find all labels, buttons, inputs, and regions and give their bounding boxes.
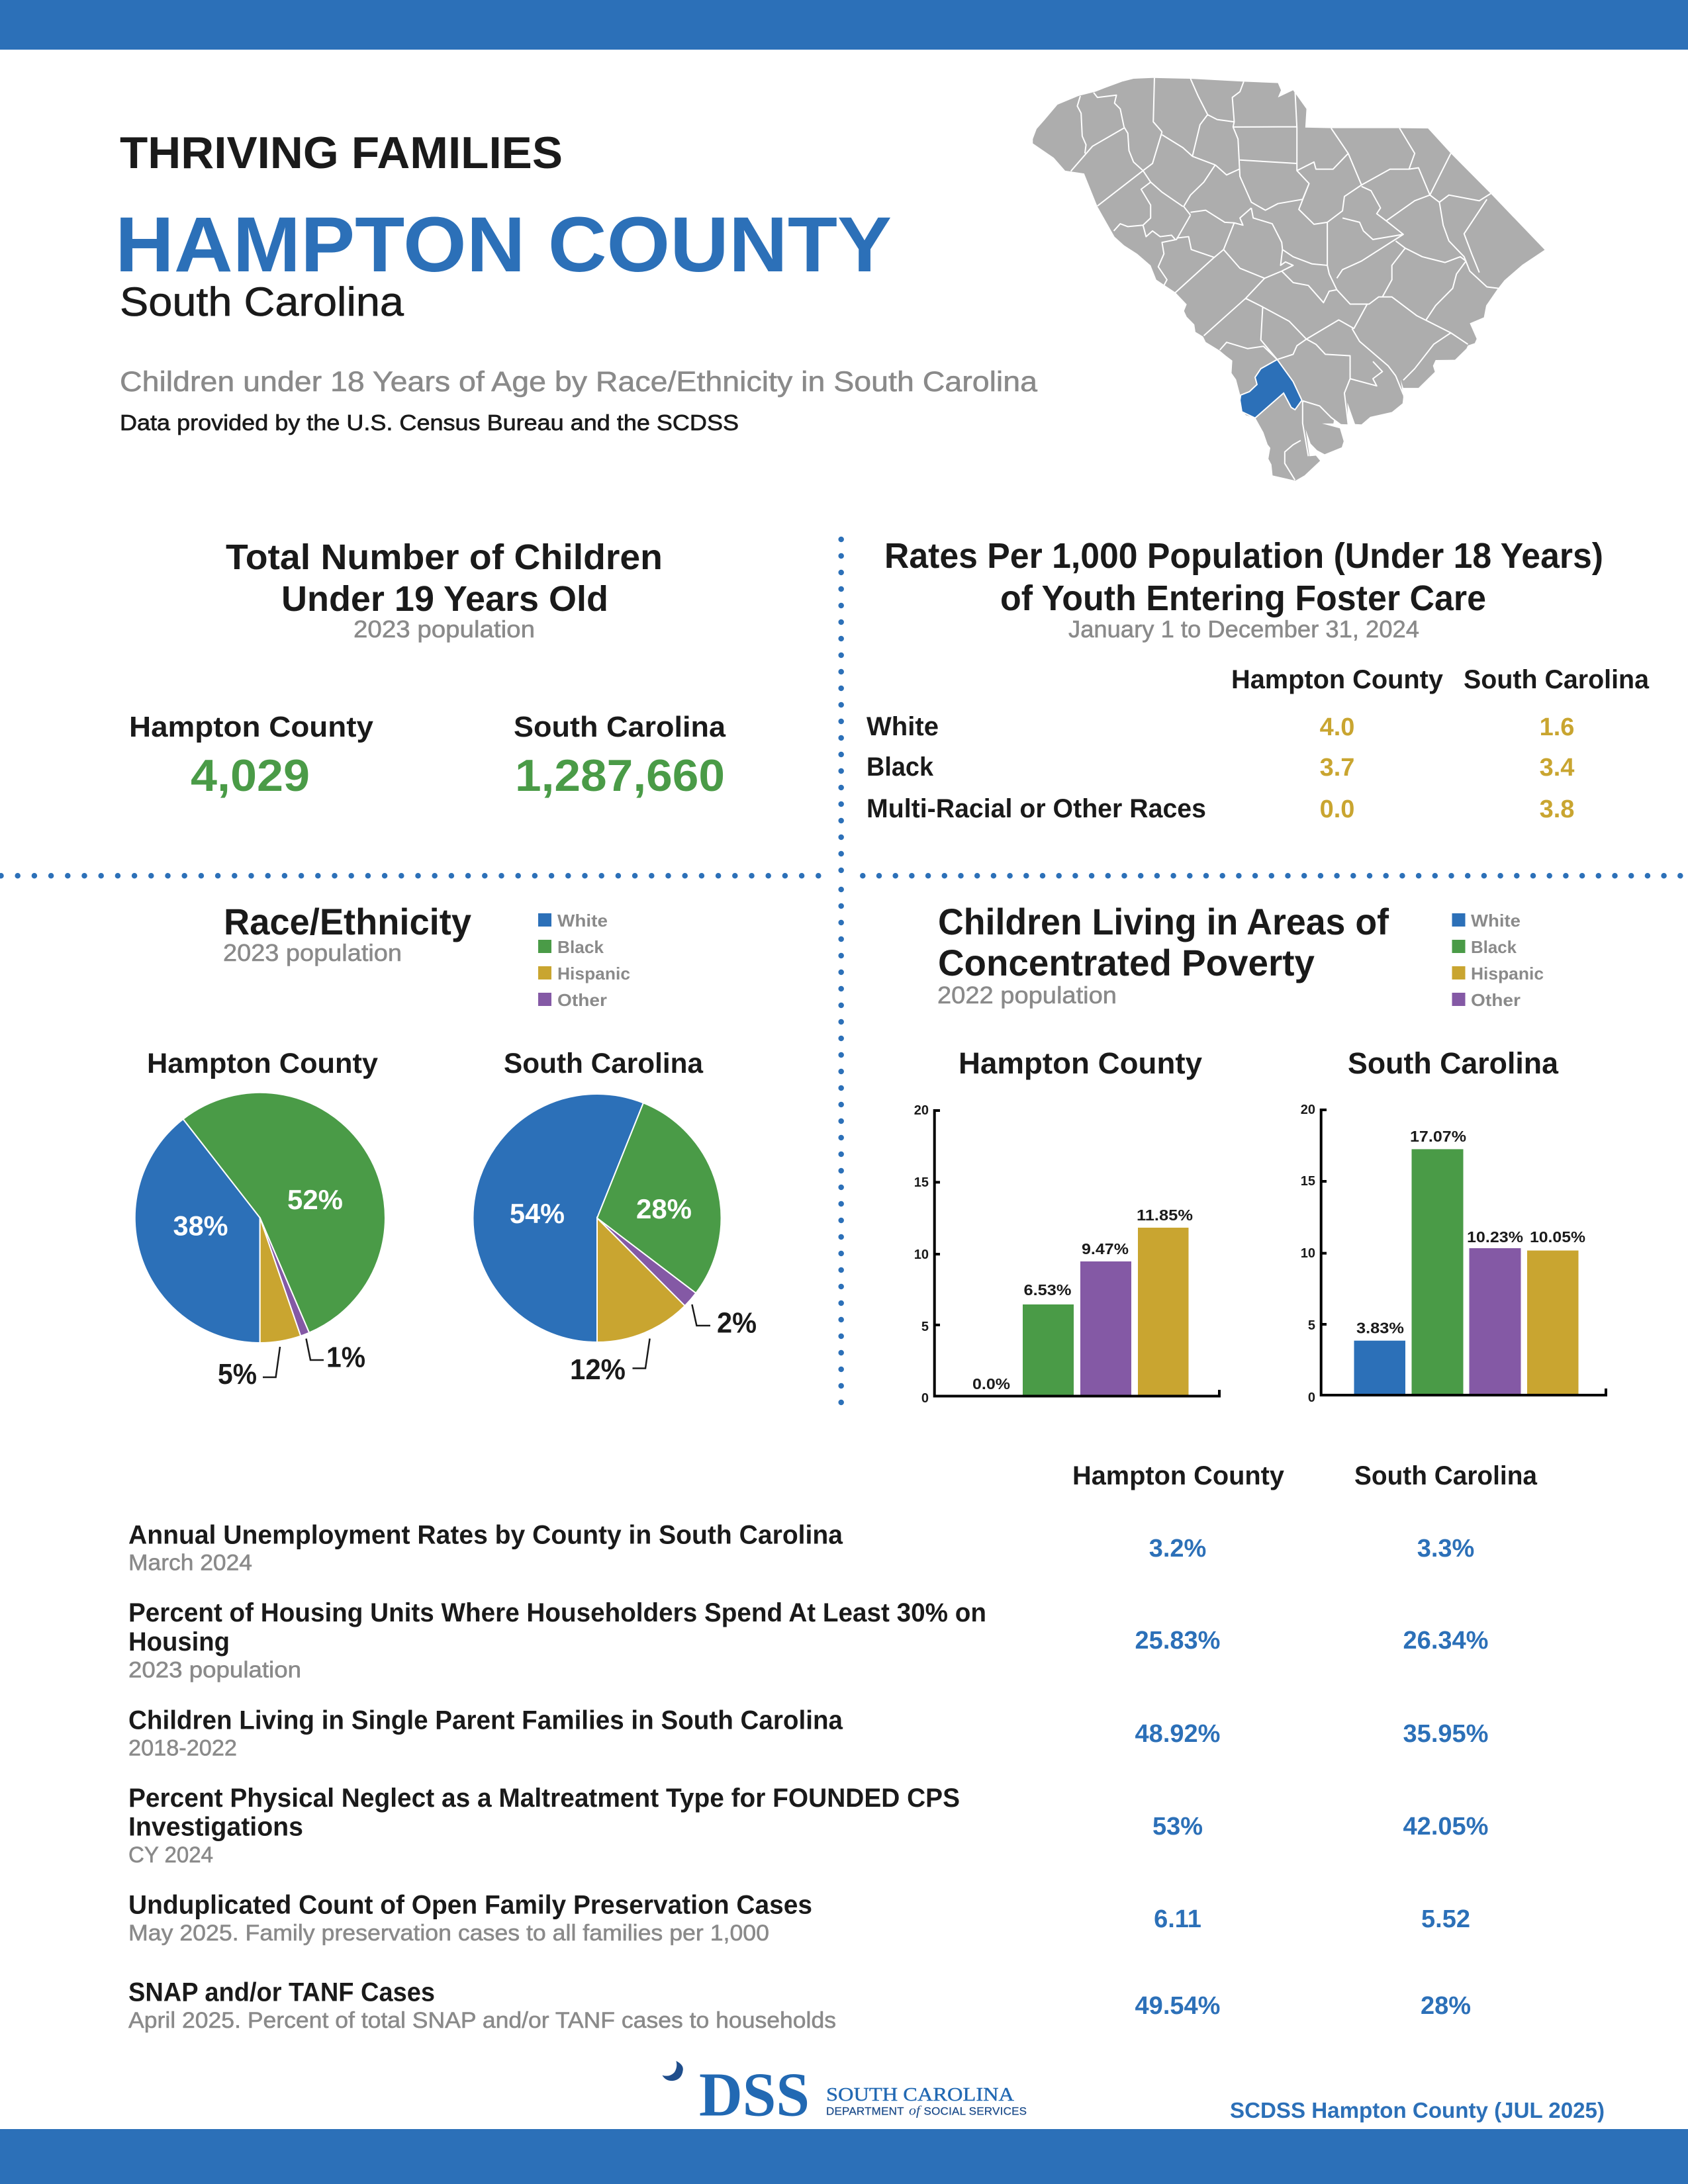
dotted divider: horizontal right xyxy=(863,873,1688,879)
bar chart: South Carolina: 5 xyxy=(1308,1318,1315,1333)
icon: crescent moon xyxy=(662,2061,683,2081)
legend: Black xyxy=(557,937,604,957)
sub heading: 2022 population xyxy=(937,981,1117,1009)
row: SNAP TANF xyxy=(128,1978,1471,2033)
panel: foster care rates: 3.8 xyxy=(1540,796,1574,823)
dotted divider: vertical lower xyxy=(838,889,844,1410)
legend: White xyxy=(1471,911,1521,931)
South Carolina count: 1,287,660 xyxy=(515,751,725,801)
heading: Race/Ethnicity xyxy=(224,901,471,942)
pie chart: South Carolina xyxy=(473,1094,721,1342)
logo: SC DSS: DEPARTMENT xyxy=(826,2105,904,2118)
row: single parent families: Children Living in Single Parent Families in South Carolina xyxy=(128,1706,843,1735)
sub heading: 2023 population xyxy=(353,615,535,643)
bar chart: Hampton County xyxy=(914,1103,1219,1406)
legend: Other xyxy=(1471,990,1521,1010)
row: physical neglect: CY 2024 xyxy=(128,1843,213,1868)
panel: race ethnicity pies xyxy=(135,901,757,1390)
row: unemployment: 3.3% xyxy=(1417,1535,1474,1563)
row: physical neglect: 53% xyxy=(1152,1813,1203,1841)
pie labels: Hampton County: 1% xyxy=(326,1341,365,1374)
row: physical neglect: 42.05% xyxy=(1403,1813,1488,1841)
legend xyxy=(1452,911,1544,1010)
map of South Carolina with Hampton County highlighted xyxy=(1033,78,1544,480)
row: physical neglect xyxy=(128,1784,1488,1868)
bar chart: Hampton County: 0 xyxy=(921,1391,929,1406)
pie chart: Hampton County xyxy=(135,1093,385,1343)
dotted divider: vertical upper xyxy=(838,539,844,871)
panel: foster care rates: 3.4 xyxy=(1540,754,1574,782)
panel: foster care rates: of Youth Entering Foster Care xyxy=(1000,578,1486,618)
row: SNAP TANF: 28% xyxy=(1421,1992,1471,2020)
title: Hampton County: HAMPTON COUNTY xyxy=(115,201,892,289)
row: family preservation xyxy=(128,1890,1470,1946)
bar chart: South Carolina: 3.83% xyxy=(1356,1320,1404,1337)
logo: SC DSS: SOUTH CAROLINA xyxy=(826,2084,1014,2105)
bottom banner xyxy=(0,2129,1688,2184)
legend: White xyxy=(557,911,608,931)
legend: Black xyxy=(1471,937,1517,957)
column headers: Hampton County xyxy=(1072,1461,1285,1490)
panel: foster care rates: 4.0 xyxy=(1320,713,1354,741)
Hampton pie heading: Hampton County xyxy=(147,1048,378,1079)
row: family preservation: 5.52 xyxy=(1421,1905,1470,1933)
rows: White xyxy=(867,712,939,741)
bar chart: South Carolina xyxy=(1301,1103,1606,1405)
Hampton County count: 4,029 xyxy=(191,751,310,801)
bar chart: South Carolina: 15 xyxy=(1301,1174,1315,1189)
bar chart: Hampton County: 5 xyxy=(921,1320,929,1334)
bar chart: South Carolina: 0 xyxy=(1308,1390,1315,1405)
dotted divider: horizontal left xyxy=(1,873,819,879)
bar chart: Hampton County: 6.53% xyxy=(1023,1281,1071,1298)
panel: foster care rates: 0.0 xyxy=(1320,796,1354,823)
panel: total number of children: Under 19 Years Old xyxy=(281,579,608,619)
pie labels: South Carolina xyxy=(510,1193,757,1386)
row: housing: 25.83% xyxy=(1135,1627,1220,1655)
panel: indicators table: South Carolina xyxy=(1354,1461,1538,1490)
panel: foster care rates: 1.6 xyxy=(1540,713,1574,741)
pie labels: Hampton County: 5% xyxy=(218,1358,257,1390)
pie labels: South Carolina: 28% xyxy=(636,1193,692,1224)
row: family preservation: Unduplicated Count of Open Family Preservation Cases xyxy=(128,1890,812,1919)
header block xyxy=(115,128,1037,435)
logo: SC DSS: SOCIAL SERVICES xyxy=(924,2105,1027,2118)
South Carolina pie heading: South Carolina xyxy=(504,1048,704,1079)
Hampton bar heading: Hampton County xyxy=(959,1046,1202,1080)
bar chart: Hampton County: 0.0% xyxy=(972,1375,1010,1392)
column headers: Hampton County xyxy=(1231,665,1444,694)
row: housing: 26.34% xyxy=(1403,1627,1488,1655)
panel: indicators table xyxy=(128,1461,1538,2033)
panel: concentrated poverty bars: Concentrated Poverty xyxy=(938,942,1315,983)
row: unemployment: March 2024 xyxy=(128,1550,252,1575)
pie labels: South Carolina: 54% xyxy=(510,1198,565,1229)
panel: concentrated poverty bars xyxy=(914,901,1606,1406)
bar chart: South Carolina: 10.23% xyxy=(1467,1228,1523,1246)
row: housing: Housing xyxy=(128,1627,230,1657)
panel: total number of children xyxy=(129,537,726,801)
legend: Other xyxy=(557,990,607,1010)
row: family preservation: 6.11 xyxy=(1154,1905,1201,1933)
row: family preservation: May 2025. Family preservation cases to all families per 1,000 xyxy=(128,1921,769,1946)
row: unemployment xyxy=(128,1521,1474,1575)
row: unemployment: 3.2% xyxy=(1149,1535,1206,1563)
bar chart: South Carolina: 17.07% xyxy=(1410,1128,1466,1145)
logo wordmark: DSS xyxy=(699,2061,810,2130)
top banner xyxy=(0,0,1688,50)
sub heading: 2023 population xyxy=(223,939,402,966)
South Carolina bar heading: South Carolina xyxy=(1348,1046,1559,1080)
sub heading: January 1 to December 31, 2024 xyxy=(1068,615,1419,643)
heading: Children Living in Areas of xyxy=(938,901,1389,942)
row: housing xyxy=(128,1598,1488,1682)
South Carolina count label: South Carolina xyxy=(514,711,726,743)
heading: Rates Per 1,000 Population (Under 18 Years) xyxy=(884,536,1603,576)
legend xyxy=(538,911,630,1010)
heading: Total Number of Children xyxy=(226,537,663,577)
Hampton County highlight xyxy=(1240,359,1302,418)
panel: foster care rates: South Carolina xyxy=(1464,665,1650,694)
title: Thriving Families: THRIVING FAMILIES xyxy=(120,128,563,178)
row: SNAP TANF: SNAP and/or TANF Cases xyxy=(128,1978,435,2007)
Hampton County count label: Hampton County xyxy=(129,711,374,743)
row: physical neglect: Investigations xyxy=(128,1812,303,1841)
bar chart: South Carolina: 20 xyxy=(1301,1103,1315,1117)
bar chart: Hampton County: 15 xyxy=(914,1175,929,1190)
logo: SC DSS: of xyxy=(909,2104,922,2118)
row: unemployment: Annual Unemployment Rates by County in South Carolina xyxy=(128,1521,843,1550)
pie labels: Hampton County: 52% xyxy=(287,1184,343,1215)
bar chart: Hampton County: 20 xyxy=(914,1103,929,1118)
bar chart: South Carolina: 10.05% xyxy=(1530,1228,1585,1246)
pie labels: South Carolina: 12% xyxy=(570,1353,626,1386)
pie labels: South Carolina: 2% xyxy=(717,1306,757,1340)
bar chart: South Carolina: 10 xyxy=(1301,1246,1315,1261)
row: single parent families: 35.95% xyxy=(1403,1720,1488,1748)
bar chart: Hampton County: 11.85% xyxy=(1137,1206,1193,1224)
footer credit: SCDSS Hampton County (JUL 2025) xyxy=(1230,2098,1605,2122)
pie labels: Hampton County xyxy=(173,1184,365,1390)
row: SNAP TANF: April 2025. Percent of total SNAP and/or TANF cases to households xyxy=(128,2008,836,2033)
row: single parent families: 2018-2022 xyxy=(128,1735,237,1760)
legend: Hispanic xyxy=(1471,964,1544,983)
legend: Hispanic xyxy=(557,964,630,983)
data source note: Data provided by the U.S. Census Bureau and the SCDSS xyxy=(120,410,739,435)
row: physical neglect: Percent Physical Neglect as a Maltreatment Type for FOUNDED CPS xyxy=(128,1784,960,1813)
logo: SC DSS xyxy=(662,2061,1027,2130)
row: single parent families: 48.92% xyxy=(1135,1720,1220,1748)
row: housing: Percent of Housing Units Where Householders Spend At Least 30% on xyxy=(128,1598,986,1627)
panel: foster care rates: Black xyxy=(867,752,934,782)
row: single parent families xyxy=(128,1706,1488,1760)
panel: foster care rates: Multi-Racial or Other Races xyxy=(867,794,1206,823)
panel: foster care rates xyxy=(867,536,1650,823)
bar chart: Hampton County: 9.47% xyxy=(1082,1240,1129,1257)
description: Children under 18 Years of Age by Race/Ethnicity in South Carolina xyxy=(120,366,1037,398)
row: housing: 2023 population xyxy=(128,1657,301,1682)
row: SNAP TANF: 49.54% xyxy=(1135,1992,1220,2020)
panel: foster care rates: 3.7 xyxy=(1320,754,1354,782)
bar chart: Hampton County: 10 xyxy=(914,1248,929,1262)
pie labels: Hampton County: 38% xyxy=(173,1210,228,1242)
subtitle: South Carolina: South Carolina xyxy=(120,279,404,324)
